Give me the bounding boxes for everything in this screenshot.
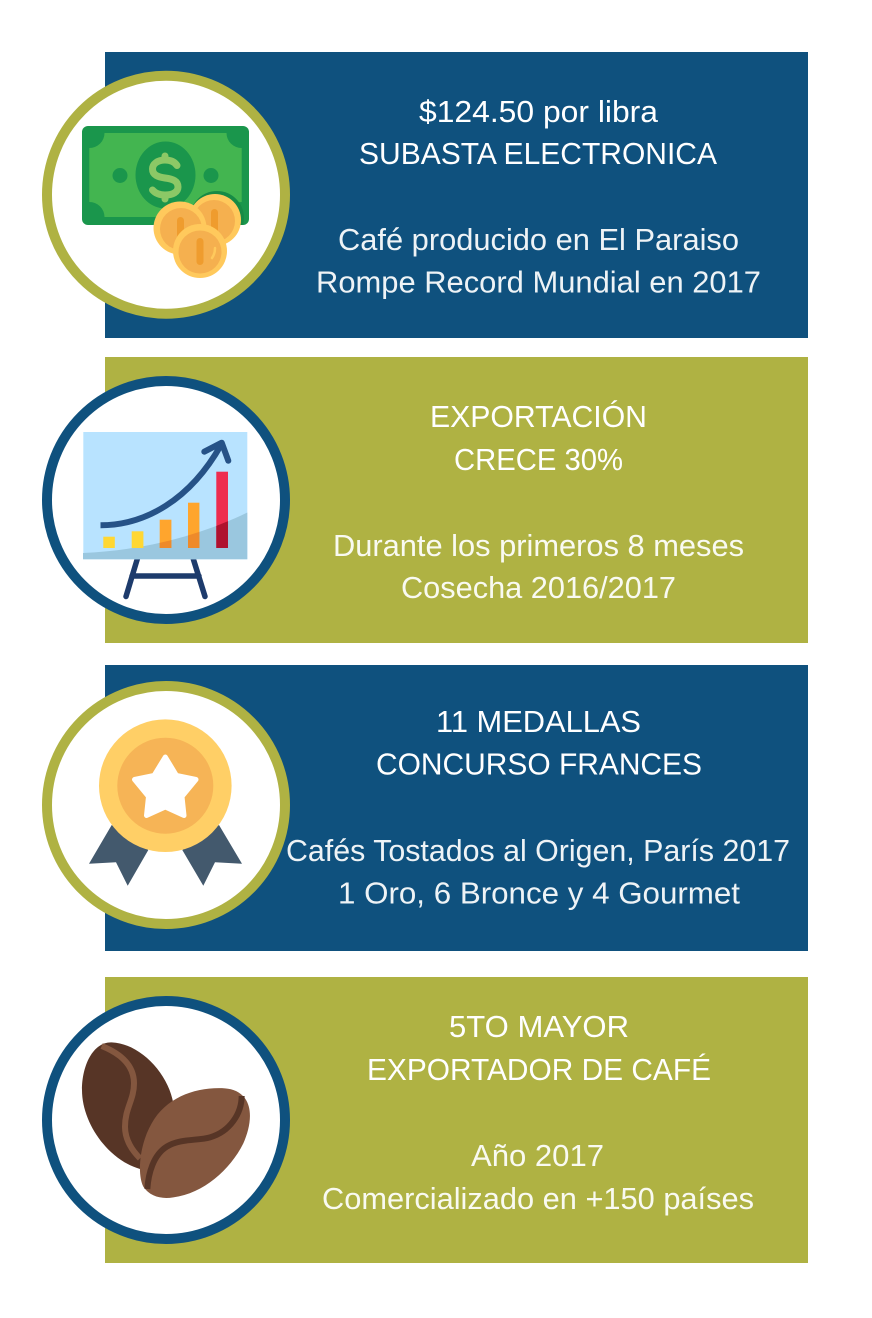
text block: exportacion details: Durante los primeros 8 meses (333, 528, 744, 563)
heading: medallas (376, 704, 702, 782)
heading: exportacion: CRECE 30% (454, 442, 623, 477)
heading: exportador: EXPORTADOR DE CAFÉ (367, 1052, 711, 1087)
heading: subasta: $124.50 por libra (419, 94, 659, 129)
text block: medallas details (286, 833, 790, 910)
text block: exportacion details: Cosecha 2016/2017 (401, 570, 676, 605)
text block: medallas details: Cafés Tostados al Origen, París 2017 (286, 833, 790, 868)
icon: coffee beans (47, 1001, 285, 1239)
heading: subasta (359, 94, 717, 171)
panel: subasta electronica (47, 52, 808, 338)
icon: medal with star (47, 686, 285, 924)
heading: subasta: SUBASTA ELECTRONICA (359, 136, 717, 171)
text block: exportador details: Comercializado en +150 países (322, 1181, 754, 1216)
text block: subasta details: Rompe Record Mundial en 2017 (316, 264, 761, 300)
panel: exportacion (47, 357, 808, 643)
text block: exportacion details (333, 528, 744, 605)
text block: subasta details (316, 222, 761, 300)
text block: subasta details: Café producido en El Paraiso (338, 222, 739, 257)
heading: medallas: CONCURSO FRANCES (376, 746, 702, 782)
icon: growth chart on easel (47, 381, 285, 619)
heading: exportador: 5TO MAYOR (449, 1009, 629, 1044)
heading: exportacion (430, 399, 647, 477)
heading: medallas: 11 MEDALLAS (436, 704, 641, 739)
heading: exportacion: EXPORTACIÓN (430, 399, 647, 434)
panel: exportador (47, 977, 808, 1263)
text block: exportador details: Año 2017 (471, 1138, 604, 1173)
text block: exportador details (322, 1138, 754, 1216)
icon: banknote and coins (47, 76, 285, 314)
heading: exportador (367, 1009, 711, 1087)
text block: medallas details: 1 Oro, 6 Bronce y 4 Gourmet (338, 876, 740, 910)
panel: medallas (47, 665, 808, 951)
